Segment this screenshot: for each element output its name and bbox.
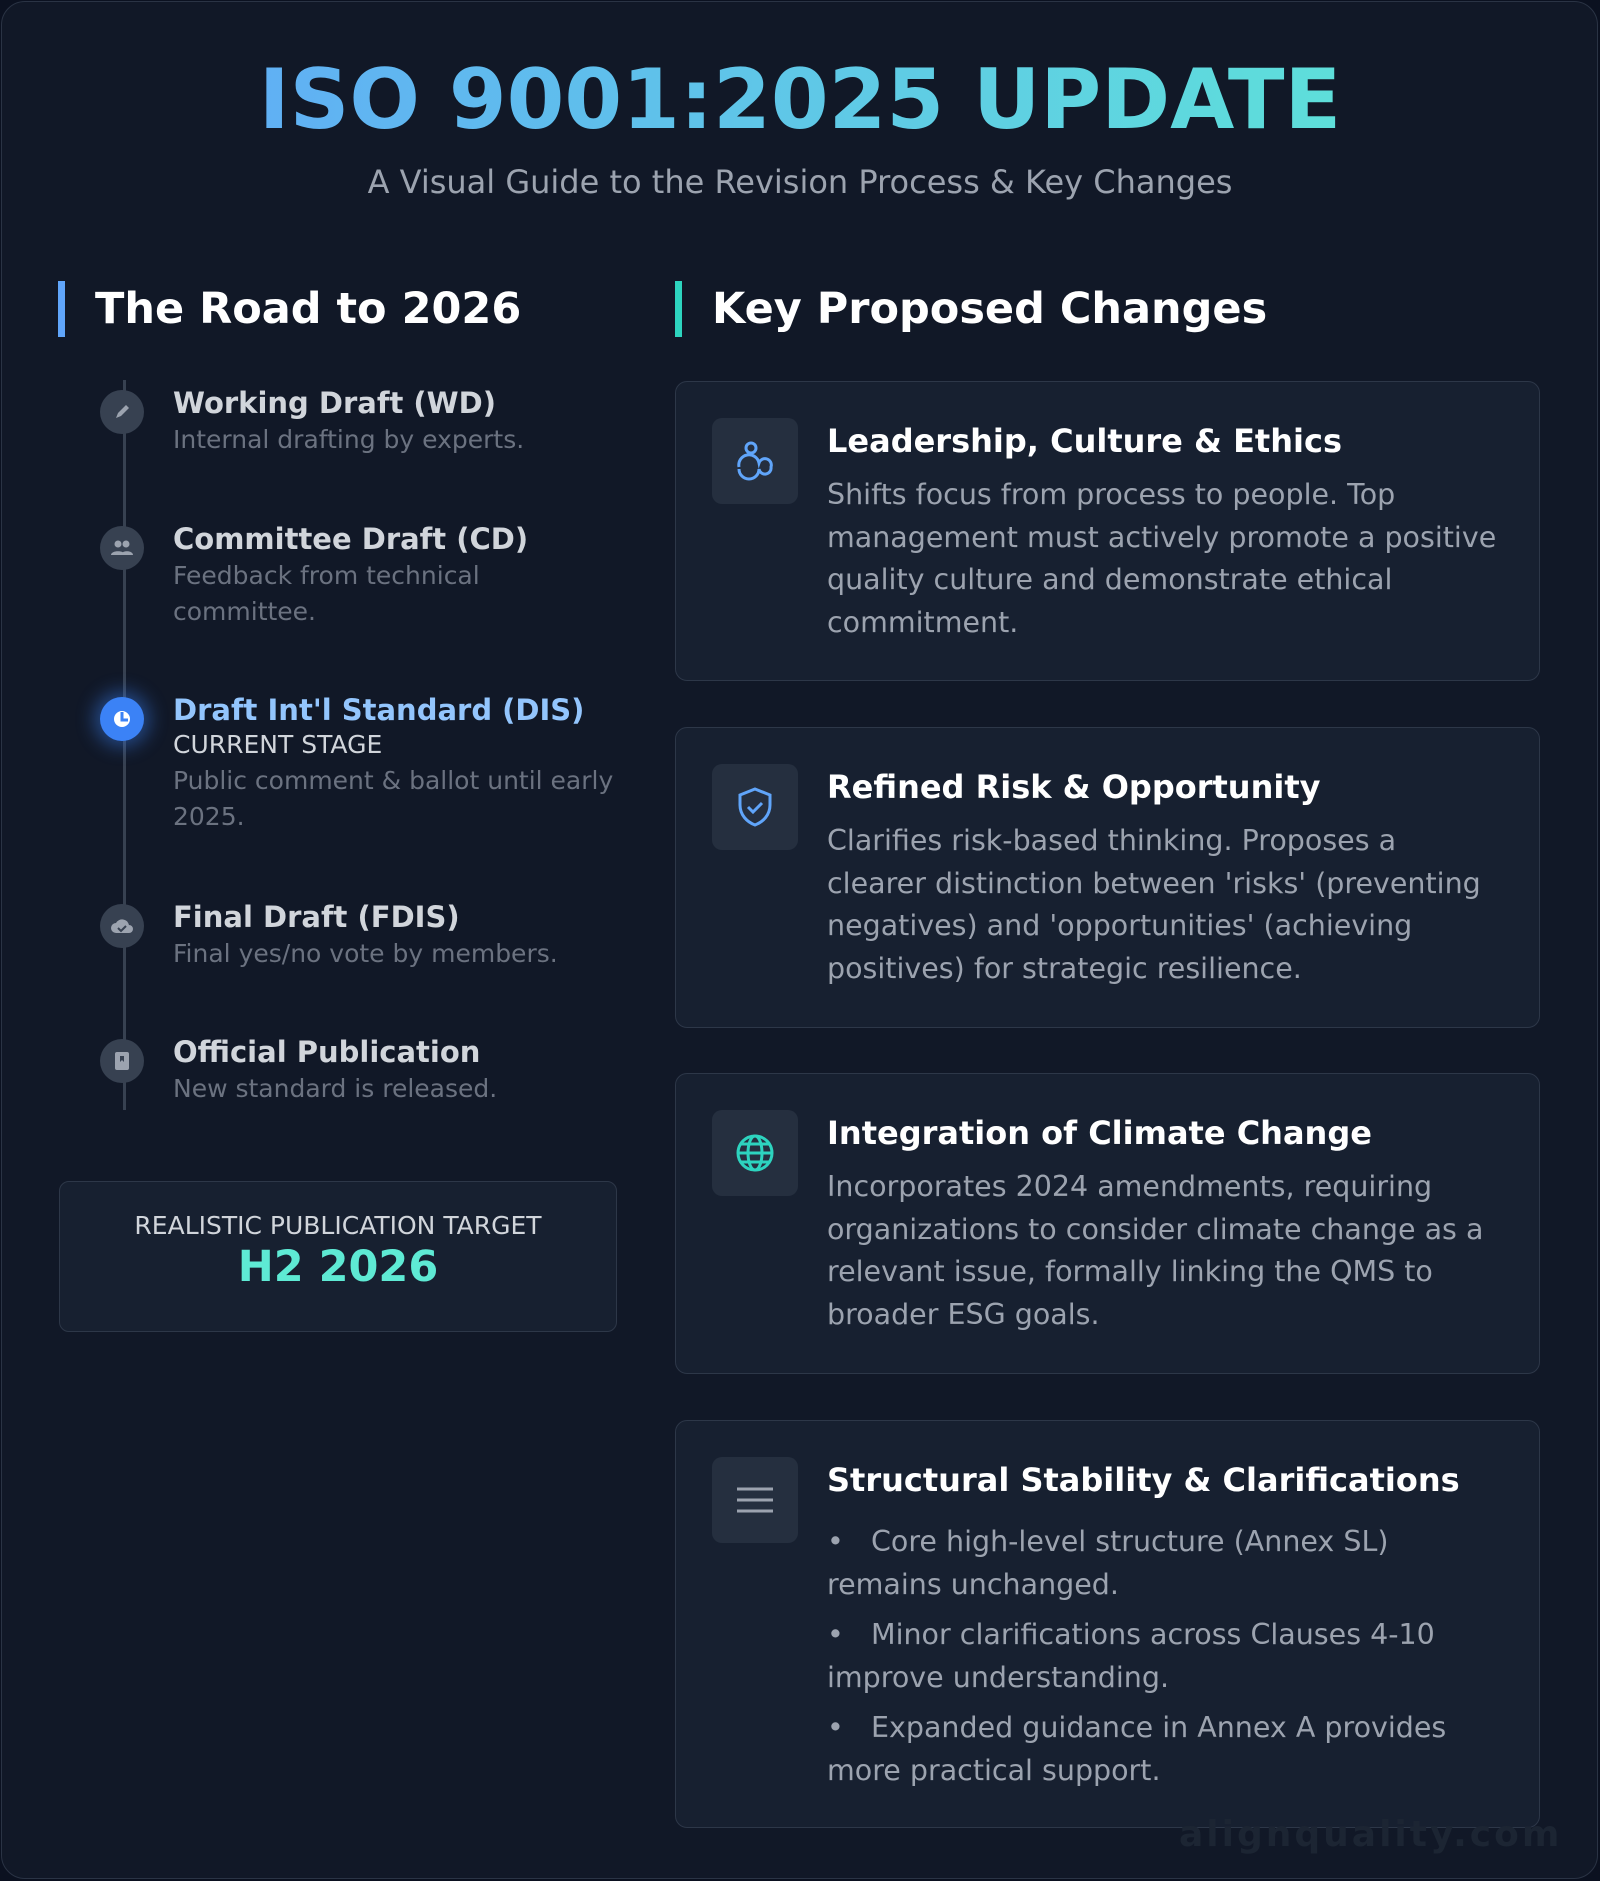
step: working draft xyxy=(100,386,524,454)
panel: climate: Integration of Climate Change xyxy=(827,1114,1372,1152)
icon: person xyxy=(712,418,798,504)
icon: pencil xyxy=(100,390,144,434)
panel: risk: negatives) and 'opportunities' (achieving xyxy=(827,909,1412,942)
panel: leadership xyxy=(675,381,1540,681)
panel: risk xyxy=(675,727,1540,1028)
step: DIS current: Public comment & ballot until early xyxy=(173,766,613,795)
callout: publication target: REALISTIC PUBLICATION TARGET xyxy=(134,1211,542,1240)
step: committee draft xyxy=(100,522,528,626)
icon: book xyxy=(100,1039,144,1083)
panel: risk: clearer distinction between 'risks' (preventing xyxy=(827,866,1481,900)
panel: leadership: quality culture and demonstrate ethical xyxy=(827,563,1392,596)
panel: structural: • Minor clarifications across Clauses 4-10 xyxy=(827,1618,1435,1651)
icon: menu lines xyxy=(712,1457,798,1543)
panel: leadership: management must actively promote a positive xyxy=(827,520,1496,554)
icon: people xyxy=(100,526,144,570)
panel: leadership: Leadership, Culture & Ethics xyxy=(827,422,1342,460)
panel: leadership: commitment. xyxy=(827,606,1018,638)
panel: structural: improve understanding. xyxy=(827,1660,1169,1694)
panel: structural xyxy=(675,1420,1540,1828)
icon: globe xyxy=(712,1110,798,1196)
step: committee draft: committee. xyxy=(173,597,316,626)
step: DIS current: CURRENT STAGE xyxy=(173,730,382,759)
step: final draft: Final Draft (FDIS) xyxy=(173,900,460,934)
panel: structural: Structural Stability & Clarifications xyxy=(827,1461,1460,1499)
panel: climate: broader ESG goals. xyxy=(827,1298,1100,1330)
title xyxy=(0,50,1600,150)
panel: structural: • Core high-level structure (Annex SL) xyxy=(827,1525,1388,1558)
icon: cloud check xyxy=(100,904,144,948)
step: working draft: Internal drafting by experts. xyxy=(173,425,524,454)
step: official publication: Official Publication xyxy=(173,1035,480,1069)
panel: risk: Refined Risk & Opportunity xyxy=(827,768,1320,806)
heading: key proposed changes: Key Proposed Changes xyxy=(712,284,1267,334)
panel: climate: Incorporates 2024 amendments, requiring xyxy=(827,1170,1432,1203)
panel: structural: remains unchanged. xyxy=(827,1568,1119,1600)
step: official publication xyxy=(100,1035,497,1103)
step: DIS current: 2025. xyxy=(173,802,245,831)
callout: publication target: H2 2026 xyxy=(238,1242,438,1292)
panel: structural: more practical support. xyxy=(827,1754,1161,1786)
step: working draft: Working Draft (WD) xyxy=(173,386,496,420)
callout: publication target xyxy=(59,1181,617,1332)
panel: structural: • Expanded guidance in Annex A provides xyxy=(827,1711,1446,1744)
timeline xyxy=(84,380,613,1110)
step: DIS current: Draft Int'l Standard (DIS) xyxy=(173,693,584,727)
panel: risk: positives) for strategic resilience. xyxy=(827,952,1302,984)
step: final draft: Final yes/no vote by members. xyxy=(173,939,558,968)
step: committee draft: Feedback from technical xyxy=(173,561,480,590)
heading: road to 2026: The Road to 2026 xyxy=(95,284,521,334)
icon: current stage xyxy=(100,697,144,741)
subtitle: A Visual Guide to the Revision Process & Key Changes xyxy=(368,163,1232,201)
icon: shield xyxy=(712,764,798,850)
panel: climate: relevant issue, formally linking the QMS to xyxy=(827,1255,1433,1288)
step: official publication: New standard is released. xyxy=(173,1074,497,1103)
step: final draft xyxy=(100,900,558,968)
panel: climate: organizations to consider climate change as a xyxy=(827,1212,1483,1246)
panel: risk: Clarifies risk-based thinking. Proposes a xyxy=(827,824,1396,857)
title: ISO 9001:2025 UPDATE xyxy=(259,51,1341,148)
step: committee draft: Committee Draft (CD) xyxy=(173,522,528,556)
panel: leadership: Shifts focus from process to people. Top xyxy=(827,478,1395,511)
step: DIS current xyxy=(84,680,613,831)
watermark: alignquality.com xyxy=(1179,1814,1562,1855)
panel: climate xyxy=(675,1073,1540,1374)
